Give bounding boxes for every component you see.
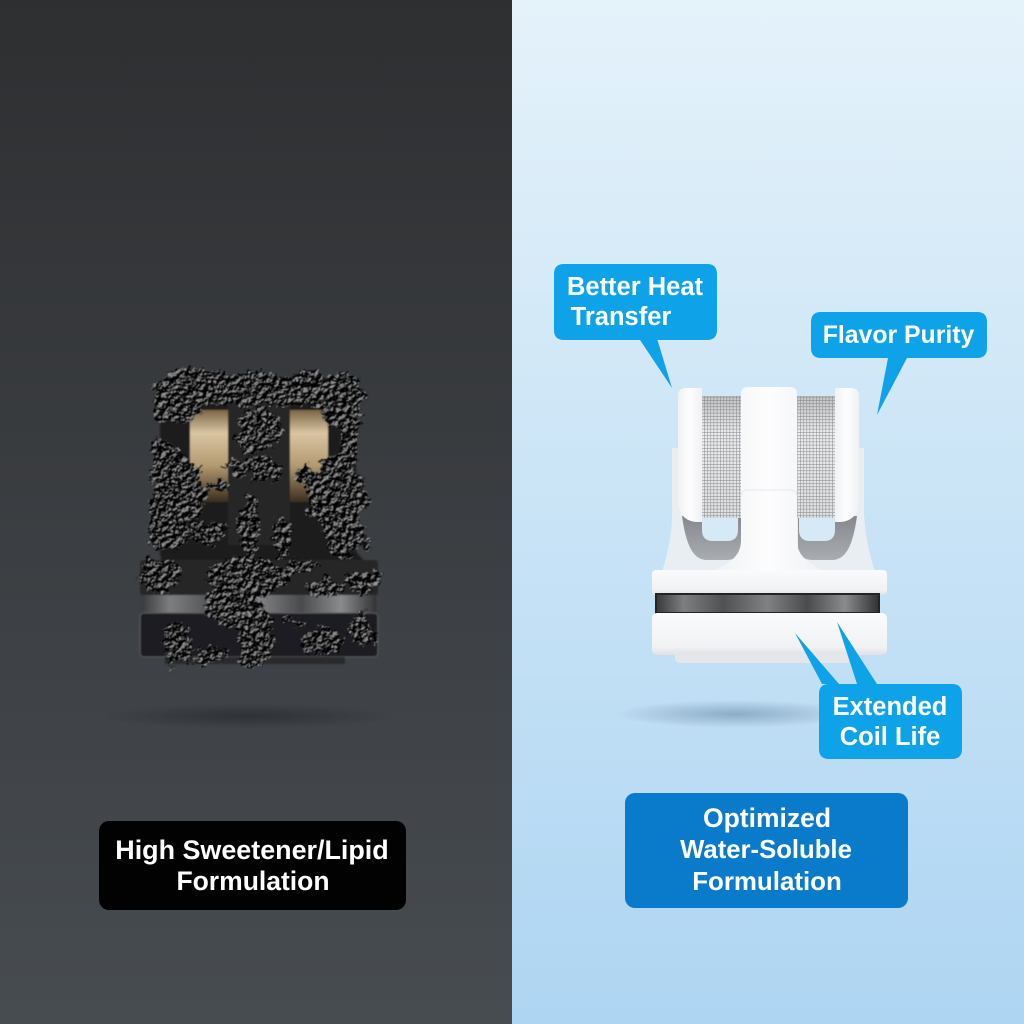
left window: [702, 515, 738, 541]
center support: [713, 387, 825, 571]
carbon deposits: [136, 372, 380, 666]
shadow under clean coil: [615, 700, 855, 728]
bottom lip: [675, 654, 850, 663]
label: optimized water-soluble formulation: Formulation: [692, 868, 842, 896]
right mesh coil: [797, 396, 837, 518]
lower base ring: [652, 613, 887, 655]
left mesh coil: [701, 396, 741, 518]
label: high sweetener formulation: High Sweetener/Lipid: [115, 835, 389, 865]
right end cap: [835, 388, 859, 522]
label: high sweetener formulation: [99, 821, 406, 910]
callout: Extended Coil Life: [795, 622, 962, 759]
label: optimized water-soluble formulation: [625, 793, 908, 908]
upper base ring: [652, 570, 887, 595]
callout: Better Heat Transfer: Better Heat: [567, 273, 704, 301]
back plate: [662, 448, 875, 572]
callout: Flavor Purity: [811, 312, 987, 415]
grey inner support left: [682, 516, 741, 560]
dark sealing band: [655, 593, 880, 614]
label: high sweetener formulation: Formulation: [176, 866, 330, 896]
callout: Better Heat Transfer: Transfer: [571, 303, 671, 331]
label: optimized water-soluble formulation: Optimized: [703, 803, 831, 833]
panel: left dark background: [0, 0, 512, 1024]
left end cap: [678, 388, 702, 522]
clean coil illustration: [652, 387, 887, 663]
callout: Extended Coil Life: Coil Life: [840, 723, 940, 751]
right window: [799, 515, 835, 541]
shadow under fouled coil: [103, 703, 393, 729]
callout: Better Heat Transfer: [554, 264, 717, 388]
callout: Flavor Purity: Flavor Purity: [823, 322, 974, 349]
grey inner support right: [798, 516, 857, 560]
fouled coil body: [140, 388, 378, 664]
callout: Extended Coil Life: Extended: [833, 693, 947, 721]
panel: right light background: [512, 0, 1024, 1024]
center notch edge: [741, 490, 797, 497]
label: optimized water-soluble formulation: Water-Soluble: [680, 836, 852, 864]
fouled coil illustration: [136, 372, 380, 666]
